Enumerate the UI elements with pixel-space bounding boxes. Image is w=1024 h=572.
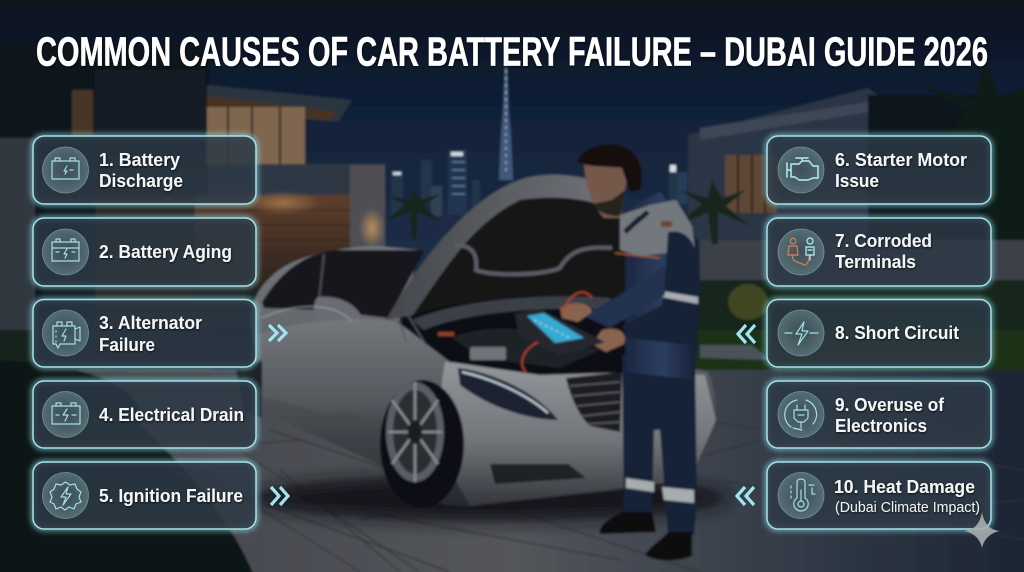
icon: battery drain <box>52 403 80 424</box>
panel: 1. Battery Discharge <box>33 136 256 204</box>
panel: 1. Battery Discharge: 1. Battery <box>99 149 181 170</box>
mechanic <box>515 144 700 560</box>
panel: 10. Heat Damage: 10. Heat Damage <box>834 476 975 497</box>
engine bay <box>398 297 640 375</box>
boots <box>600 512 656 534</box>
silver car <box>236 175 716 508</box>
panel: 7. Corroded Terminals <box>767 218 991 286</box>
grille <box>566 372 622 432</box>
panel: 2. Battery Aging <box>33 218 256 286</box>
legs <box>622 355 697 535</box>
icon: battery <box>52 158 79 179</box>
panel: 8. Short Circuit: 8. Short Circuit <box>835 322 959 343</box>
hood underside <box>412 198 640 318</box>
windshield and side glass <box>262 250 425 318</box>
arrow: panel 3 chevrons <box>269 325 286 341</box>
hands <box>560 303 592 322</box>
panel: 7. Corroded Terminals: Terminals <box>835 251 916 272</box>
panel: 9. Overuse of Electronics <box>767 381 991 448</box>
panel: 10. Heat Damage: (Dubai Climate Impact) <box>835 500 980 516</box>
icon: plug <box>785 400 817 430</box>
panel: 3. Alternator Failure: Failure <box>99 334 155 355</box>
panel: 5. Ignition Failure: 5. Ignition Failure <box>99 485 243 506</box>
panel: 6. Starter Motor Issue: Issue <box>835 170 879 191</box>
icon: ignition gear <box>50 482 81 510</box>
icon: sparkle watermark <box>964 512 1000 548</box>
panel: 9. Overuse of Electronics: 9. Overuse of <box>835 394 945 415</box>
torso <box>625 192 700 380</box>
panel: 10. Heat Damage <box>767 462 991 529</box>
panel: 6. Starter Motor Issue <box>767 136 991 204</box>
palm trees <box>385 60 1024 244</box>
driveway <box>0 360 1024 572</box>
panel: 5. Ignition Failure <box>33 462 256 529</box>
rear highlight <box>262 307 352 322</box>
icon: thermometer <box>791 479 815 511</box>
panel: 3. Alternator Failure: 3. Alternator <box>99 312 202 333</box>
panel: 3. Alternator Failure <box>33 300 256 367</box>
window pillar <box>318 254 324 310</box>
icon: aging battery <box>52 239 79 261</box>
icon: alternator <box>53 322 80 348</box>
panel: 4. Electrical Drain: 4. Electrical Drain <box>99 404 244 425</box>
icon: corroded terminals <box>788 238 814 265</box>
wing mirror <box>314 297 362 320</box>
headlight <box>458 368 558 420</box>
panel: 6. Starter Motor Issue: 6. Starter Motor <box>835 149 967 170</box>
arrow: panel 10 chevrons <box>737 487 754 505</box>
side door panel <box>255 319 455 470</box>
panel: 7. Corroded Terminals: 7. Corroded <box>835 230 932 251</box>
tablet <box>515 309 605 356</box>
night sky <box>0 0 1024 300</box>
front wheel <box>380 380 464 508</box>
dubai skyline <box>391 65 687 216</box>
panel: 8. Short Circuit <box>767 300 991 367</box>
icon: engine <box>787 158 818 180</box>
rear wheel <box>236 360 262 418</box>
panel: 4. Electrical Drain <box>33 381 256 448</box>
front fender <box>440 362 716 506</box>
panel: 9. Overuse of Electronics: Electronics <box>835 415 927 436</box>
car shadow <box>250 474 730 522</box>
open hood <box>386 175 640 320</box>
uae flag <box>676 256 689 265</box>
cowl panel <box>412 296 614 330</box>
arm <box>622 232 700 345</box>
right house <box>688 88 1024 285</box>
car body <box>251 246 716 506</box>
arrow: panel 5 chevrons <box>271 487 288 505</box>
lower intake <box>490 464 586 484</box>
left house <box>0 45 385 385</box>
panel: 2. Battery Aging: 2. Battery Aging <box>99 241 232 262</box>
icon: short circuit <box>785 322 818 345</box>
panel: 1. Battery Discharge: Discharge <box>99 170 183 191</box>
head <box>584 155 627 218</box>
arrow: panel 8 chevrons <box>738 325 755 343</box>
red cable <box>522 292 592 372</box>
hedge and lawn <box>695 280 1024 400</box>
